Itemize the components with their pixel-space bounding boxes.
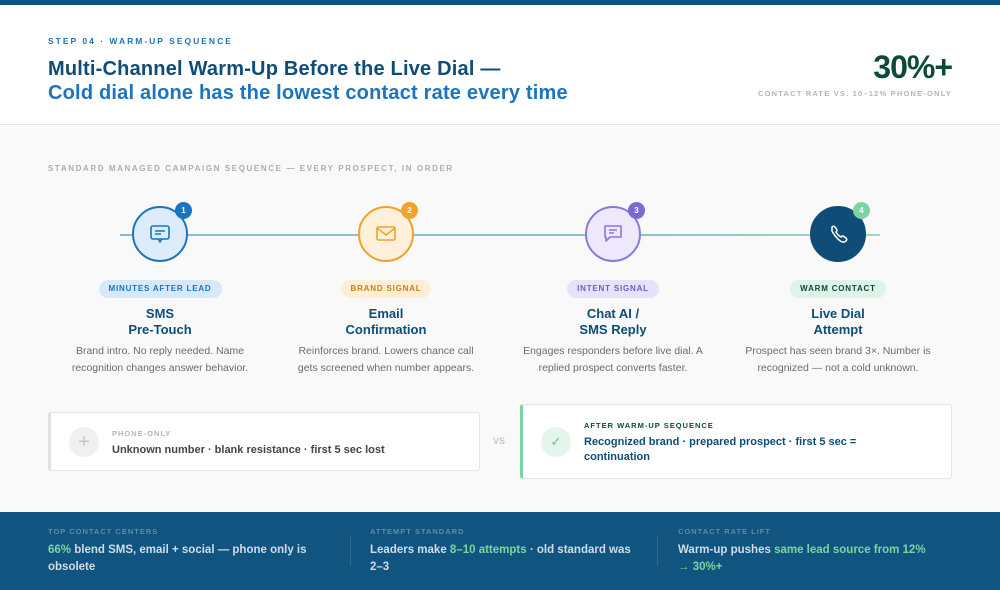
step 4 [745, 202, 931, 374]
icon: plus: + [78, 431, 90, 453]
footer col 1: TOP CONTACT CENTERS [48, 527, 158, 536]
footer col 1 [48, 527, 307, 573]
step 1 [72, 202, 248, 374]
icon: check: ✓ [551, 434, 561, 449]
footer col 1: 66% blend SMS, email + social — phone only is obsolete [48, 544, 307, 573]
step 4: Live Dial [811, 306, 865, 321]
icon: sms [132, 206, 188, 262]
footer col 2: Leaders make 8–10 attempts · old standard was 2–3 [370, 544, 631, 573]
step 3: INTENT SIGNAL [577, 284, 649, 293]
footer col 3 [678, 527, 926, 573]
step 1: recognition changes answer behavior. [72, 362, 248, 374]
step 3: SMS Reply [579, 322, 647, 337]
step 2: Reinforces brand. Lowers chance call [298, 345, 474, 357]
step 1: SMS [146, 306, 174, 321]
icon: chat [585, 206, 641, 262]
card: phone-only: PHONE-ONLY [112, 429, 171, 438]
footer col 3: → 30%+ [678, 561, 722, 573]
step 3: Engages responders before live dial. A [523, 345, 703, 357]
step 4: Attempt [813, 322, 863, 337]
title [48, 58, 568, 104]
top bar [0, 0, 1000, 5]
stat: CONTACT RATE VS. 10–12% PHONE-ONLY [758, 89, 952, 98]
step 2 [298, 202, 474, 374]
header [0, 5, 1000, 125]
icon: phone [810, 206, 866, 262]
step 3 [523, 202, 703, 374]
step 3: replied prospect converts faster. [539, 362, 687, 374]
footer col 2 [370, 527, 631, 573]
timeline line [120, 234, 880, 236]
footer [0, 512, 1000, 590]
stat: 30%+ [873, 49, 952, 85]
vs: VS [493, 436, 505, 446]
card: phone-only: Unknown number · blank resistance · first 5 sec lost [112, 444, 385, 456]
icon: check [541, 427, 571, 457]
icon: chat: 3 [634, 206, 639, 215]
stat [758, 49, 952, 98]
step 1: Pre-Touch [128, 322, 192, 337]
step 1: Brand intro. No reply needed. Name [76, 345, 244, 357]
icon: email: 2 [407, 206, 412, 215]
step 3: Chat AI / [587, 306, 639, 321]
step 2: Email [369, 306, 403, 321]
footer col 2: ATTEMPT STANDARD [370, 527, 464, 536]
step 1: MINUTES AFTER LEAD [108, 284, 212, 293]
footer col 3: Warm-up pushes same lead source from 12% [678, 544, 926, 556]
icon: phone: 4 [859, 206, 864, 215]
card: after warm-up [520, 404, 952, 479]
step 2: Confirmation [346, 322, 426, 337]
section label: STANDARD MANAGED CAMPAIGN SEQUENCE — EVERY PROSPECT, IN ORDER [48, 164, 454, 173]
icon: plus [69, 427, 99, 457]
eyebrow: STEP 04 · WARM-UP SEQUENCE [48, 36, 233, 46]
icon: email [358, 206, 414, 262]
title: Multi-Channel Warm-Up Before the Live Dial — [48, 58, 501, 80]
step 4: Prospect has seen brand 3×. Number is [745, 345, 931, 357]
step 2: BRAND SIGNAL [351, 284, 421, 293]
title: Cold dial alone has the lowest contact rate every time [48, 82, 568, 104]
step 4: WARM CONTACT [800, 284, 876, 293]
step 2: gets screened when number appears. [298, 362, 474, 374]
card: phone-only [48, 412, 480, 471]
step 4: recognized — not a cold unknown. [757, 362, 919, 374]
icon: sms: 1 [181, 206, 186, 215]
card: after warm-up: AFTER WARM-UP SEQUENCE [584, 421, 714, 430]
footer col 3: CONTACT RATE LIFT [678, 527, 771, 536]
card: after warm-up: Recognized brand · prepared prospect · first 5 sec = continuation [584, 436, 856, 463]
